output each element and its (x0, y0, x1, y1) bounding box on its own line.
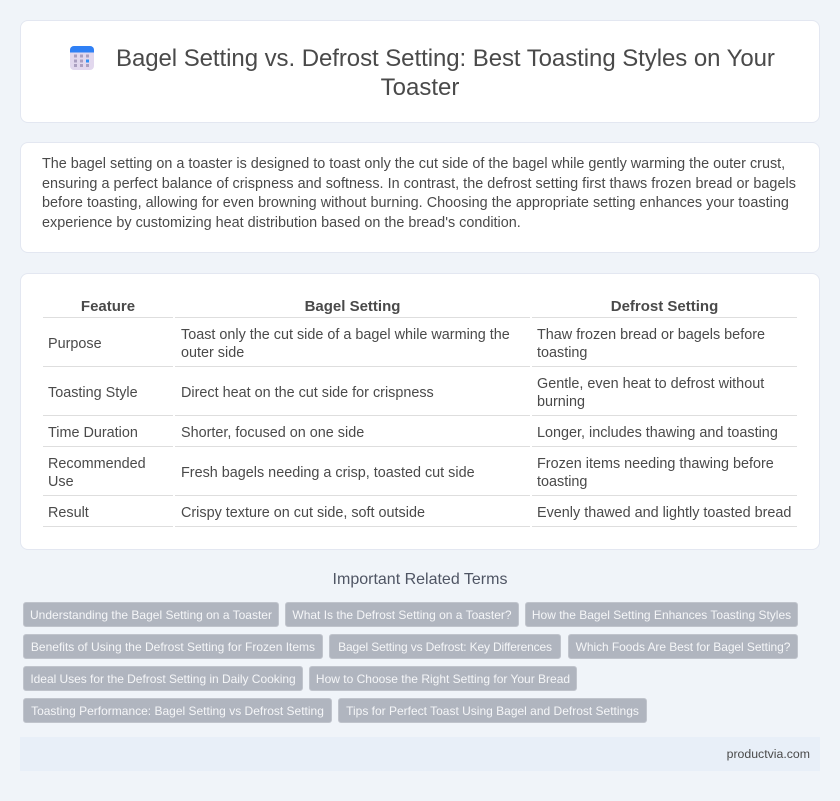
table: Time Duration (48, 425, 138, 441)
header card (20, 20, 820, 123)
table: Purpose (48, 336, 102, 352)
intro text: experience by customizing heat distribution based on the bread's condition. (42, 214, 521, 230)
icon: calendar (70, 46, 94, 70)
title: Toaster (381, 74, 459, 101)
table: toasting (537, 345, 587, 361)
table: Toasting Style (48, 385, 138, 401)
table: Crispy texture on cut side, soft outside (181, 505, 425, 521)
related terms tags: How the Bagel Setting Enhances Toasting Styles (532, 608, 791, 622)
related terms tags: Which Foods Are Best for Bagel Setting? (576, 640, 790, 654)
table: Use (48, 474, 74, 490)
related terms tags: What Is the Defrost Setting on a Toaster? (292, 608, 512, 622)
table: Evenly thawed and lightly toasted bread (537, 505, 791, 521)
table: Recommended (48, 456, 146, 472)
intro text: before toasting, allowing for even browning without burning. Choosing the appropriate setting enhances your toasting (42, 195, 789, 211)
related terms tags: Tips for Perfect Toast Using Bagel and Defrost Settings (346, 704, 639, 718)
intro panel (20, 142, 820, 253)
intro text: The bagel setting on a toaster is designed to toast only the cut side of the bagel while gently warming the outer crust, (42, 156, 785, 172)
table: Direct heat on the cut side for crispness (181, 385, 434, 401)
related terms tags (23, 602, 798, 723)
table: Shorter, focused on one side (181, 425, 364, 441)
related terms tags: Understanding the Bagel Setting on a Toaster (30, 608, 272, 622)
related terms tags: Ideal Uses for the Defrost Setting in Daily Cooking (30, 672, 296, 686)
table (43, 298, 797, 527)
title: Bagel Setting vs. Defrost Setting: Best Toasting Styles on Your (116, 45, 775, 72)
intro text: ensuring a perfect balance of crispness and softness. In contrast, the defrost setting first thaws frozen bread or bagels (42, 176, 796, 192)
related terms tags: Toasting Performance: Bagel Setting vs Defrost Setting (31, 704, 324, 718)
footer bar (20, 737, 820, 771)
related terms tags: Bagel Setting vs Defrost: Key Differences (338, 640, 552, 654)
table: Fresh bagels needing a crisp, toasted cut side (181, 465, 475, 481)
table: Feature (81, 298, 135, 315)
table: outer side (181, 345, 244, 361)
table: burning (537, 394, 585, 410)
table: Longer, includes thawing and toasting (537, 425, 778, 441)
related terms tags: How to Choose the Right Setting for Your Bread (316, 672, 570, 686)
table: Bagel Setting (305, 298, 400, 315)
related terms heading: Important Related Terms (333, 571, 507, 588)
table: Gentle, even heat to defrost without (537, 376, 764, 392)
table: Defrost Setting (611, 298, 718, 315)
table: Frozen items needing thawing before (537, 456, 774, 472)
intro text (42, 156, 796, 230)
table: Thaw frozen bread or bagels before (537, 327, 765, 343)
title (116, 45, 775, 101)
table: Result (48, 505, 89, 521)
table: toasting (537, 474, 587, 490)
table: Toast only the cut side of a bagel while warming the (181, 327, 510, 343)
footer source: productvia.com (727, 747, 810, 761)
related terms tags: Benefits of Using the Defrost Setting for Frozen Items (31, 640, 315, 654)
comparison table panel (20, 273, 820, 550)
